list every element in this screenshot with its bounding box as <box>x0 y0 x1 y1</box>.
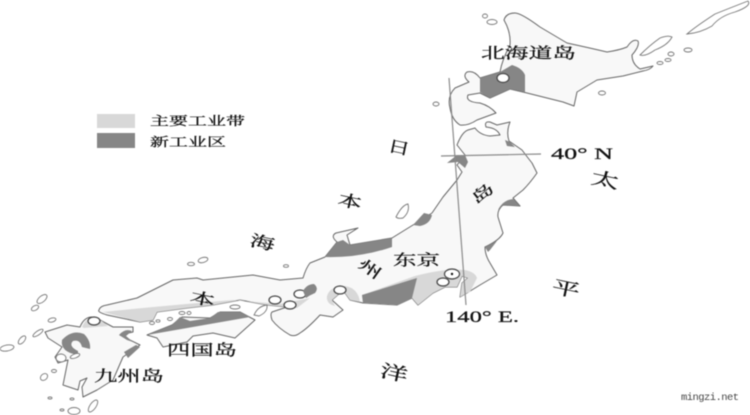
label: Pacific, character 2: 平 <box>550 277 582 302</box>
label: Sea of Japan, character 1: 日 <box>386 138 411 159</box>
label: Sea of Japan, character 2: 本 <box>336 191 363 213</box>
island: Shikoku <box>147 312 255 347</box>
main industrial belt: Ise Bay <box>327 286 360 306</box>
legend <box>97 113 245 149</box>
legend swatch: new zone <box>97 133 135 148</box>
label: Honshu, character 2: 州 <box>355 256 384 283</box>
island: Awaji <box>254 305 267 316</box>
label: Honshu, character 3: 岛 <box>468 180 498 208</box>
label: 40N: 40° N <box>551 146 614 163</box>
city marker: Yokohama <box>437 278 449 286</box>
new industrial zone: Ariake <box>62 332 90 355</box>
city marker: Nagoya <box>334 286 346 294</box>
label: Shikoku: 四国岛 <box>167 342 237 359</box>
label: Sea of Japan, character 3: 海 <box>248 232 276 254</box>
label: Hokkaido: 北海道岛 <box>481 45 576 62</box>
label: Pacific, character 3: 洋 <box>378 361 410 386</box>
watermark: mingzi.net <box>681 392 739 404</box>
city marker: Kyoto <box>294 290 306 298</box>
city: Sapporo <box>497 74 509 82</box>
label: Kyushu: 九州岛 <box>94 368 164 385</box>
new industrial zone: Tokai <box>362 278 417 305</box>
new industrial zone: Niigata <box>413 213 432 226</box>
label: Honshu, character 1: 本 <box>188 289 216 311</box>
new industrial zone: Akita <box>447 155 468 168</box>
main industrial belt: Setouchi <box>103 298 310 322</box>
city marker: Kobe <box>284 301 296 309</box>
main industrial belt: Kitakyushu <box>82 318 108 328</box>
island: Honshu <box>99 122 537 336</box>
legend swatch: main belt <box>97 114 135 128</box>
label: Pacific, character 1: 太 <box>589 168 621 193</box>
legend text: new zone: 新工业区 <box>150 135 226 149</box>
label: Tokyo: 东京 <box>393 252 440 269</box>
city marker: Osaka <box>269 296 281 304</box>
island: Hokkaido <box>449 13 653 125</box>
label: 140E: 140° E. <box>445 309 519 326</box>
Lake Biwa new industrial zone <box>303 284 317 298</box>
main industrial belt: Tokyo to Nagoya <box>362 270 477 305</box>
new industrial zone: Miyazaki <box>124 345 140 358</box>
legend text: main belt: 主要工业带 <box>150 113 245 128</box>
city marker: Tokyo <box>444 269 460 279</box>
new industrial zone: Oita <box>119 330 133 342</box>
Hokkaido new industrial zone <box>480 65 525 98</box>
island: Kyushu <box>45 317 140 397</box>
Shikoku new industrial zone <box>147 312 250 335</box>
city marker: Fukuoka <box>88 317 100 325</box>
meridian 140E line <box>449 78 466 305</box>
parallel 40N line <box>441 154 541 156</box>
new industrial zone: northeast coast <box>485 140 520 252</box>
new industrial zone: Hokuriku <box>325 238 392 257</box>
